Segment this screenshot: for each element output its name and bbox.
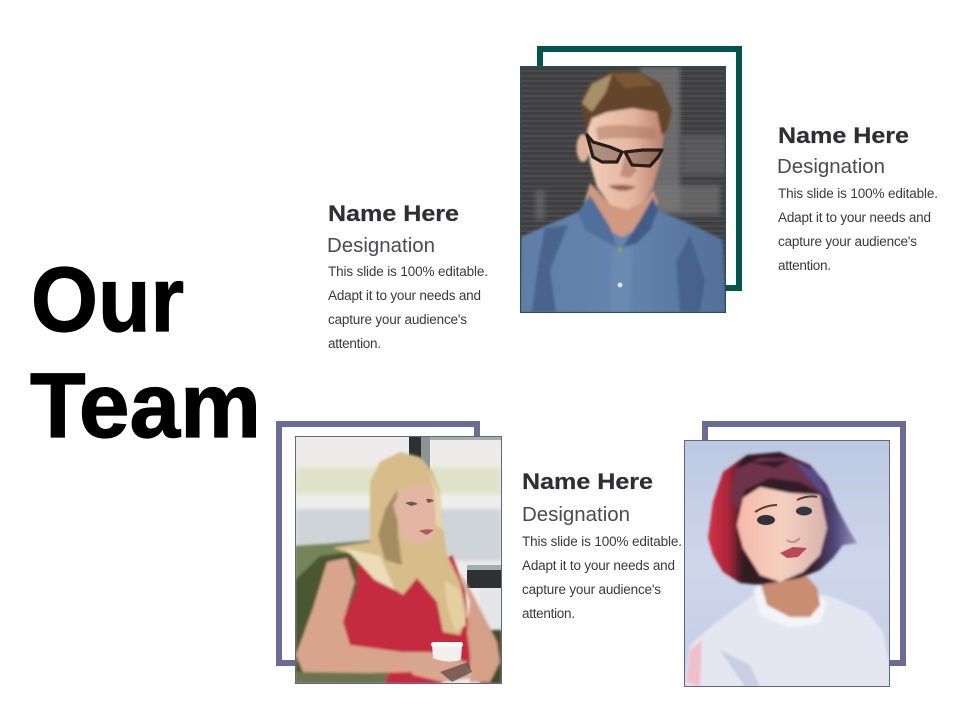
photo: woman with short hair (684, 440, 890, 687)
name and description: attention. (522, 606, 575, 621)
panel: team member middle left: Name Here (328, 201, 459, 226)
name and description: Adapt it to your needs and (778, 210, 931, 225)
teal frame (540, 49, 739, 288)
purple frame (705, 424, 903, 663)
panel: team member bottom right (684, 424, 903, 687)
name and description: capture your audience's (522, 582, 661, 597)
name and description: Designation (522, 504, 630, 526)
name and description (777, 123, 938, 273)
photo: man with glasses (520, 66, 726, 313)
photo: woman in red dress (295, 436, 502, 684)
panel: team member top right (520, 49, 938, 313)
face details (405, 502, 418, 506)
name and description: This slide is 100% editable. (778, 186, 938, 201)
face details (755, 505, 777, 512)
panel: team member middle left: capture your audience's (328, 312, 467, 327)
title: Our Team: Our (31, 249, 184, 351)
name and description: capture your audience's (778, 234, 917, 249)
title: Our Team: Team (30, 355, 261, 457)
name and description: This slide is 100% editable. (522, 534, 682, 549)
name and description: attention. (778, 258, 831, 273)
name and description: Designation (777, 156, 885, 178)
glasses (587, 135, 662, 166)
coffee cup (432, 645, 462, 662)
purple frame (279, 424, 477, 663)
name and description (522, 469, 682, 621)
panel: team member middle left (327, 201, 488, 351)
title: Our Team (30, 249, 261, 457)
name and description: Adapt it to your needs and (522, 558, 675, 573)
name and description: Name Here (522, 469, 653, 494)
name and description: Name Here (778, 123, 909, 148)
panel: team member middle left: Designation (327, 235, 435, 257)
panel: team member bottom left (279, 424, 682, 684)
panel: team member middle left: This slide is 100% editable. (328, 264, 488, 279)
panel: team member middle left: Adapt it to your needs and (328, 288, 481, 303)
panel: team member middle left: attention. (328, 336, 381, 351)
